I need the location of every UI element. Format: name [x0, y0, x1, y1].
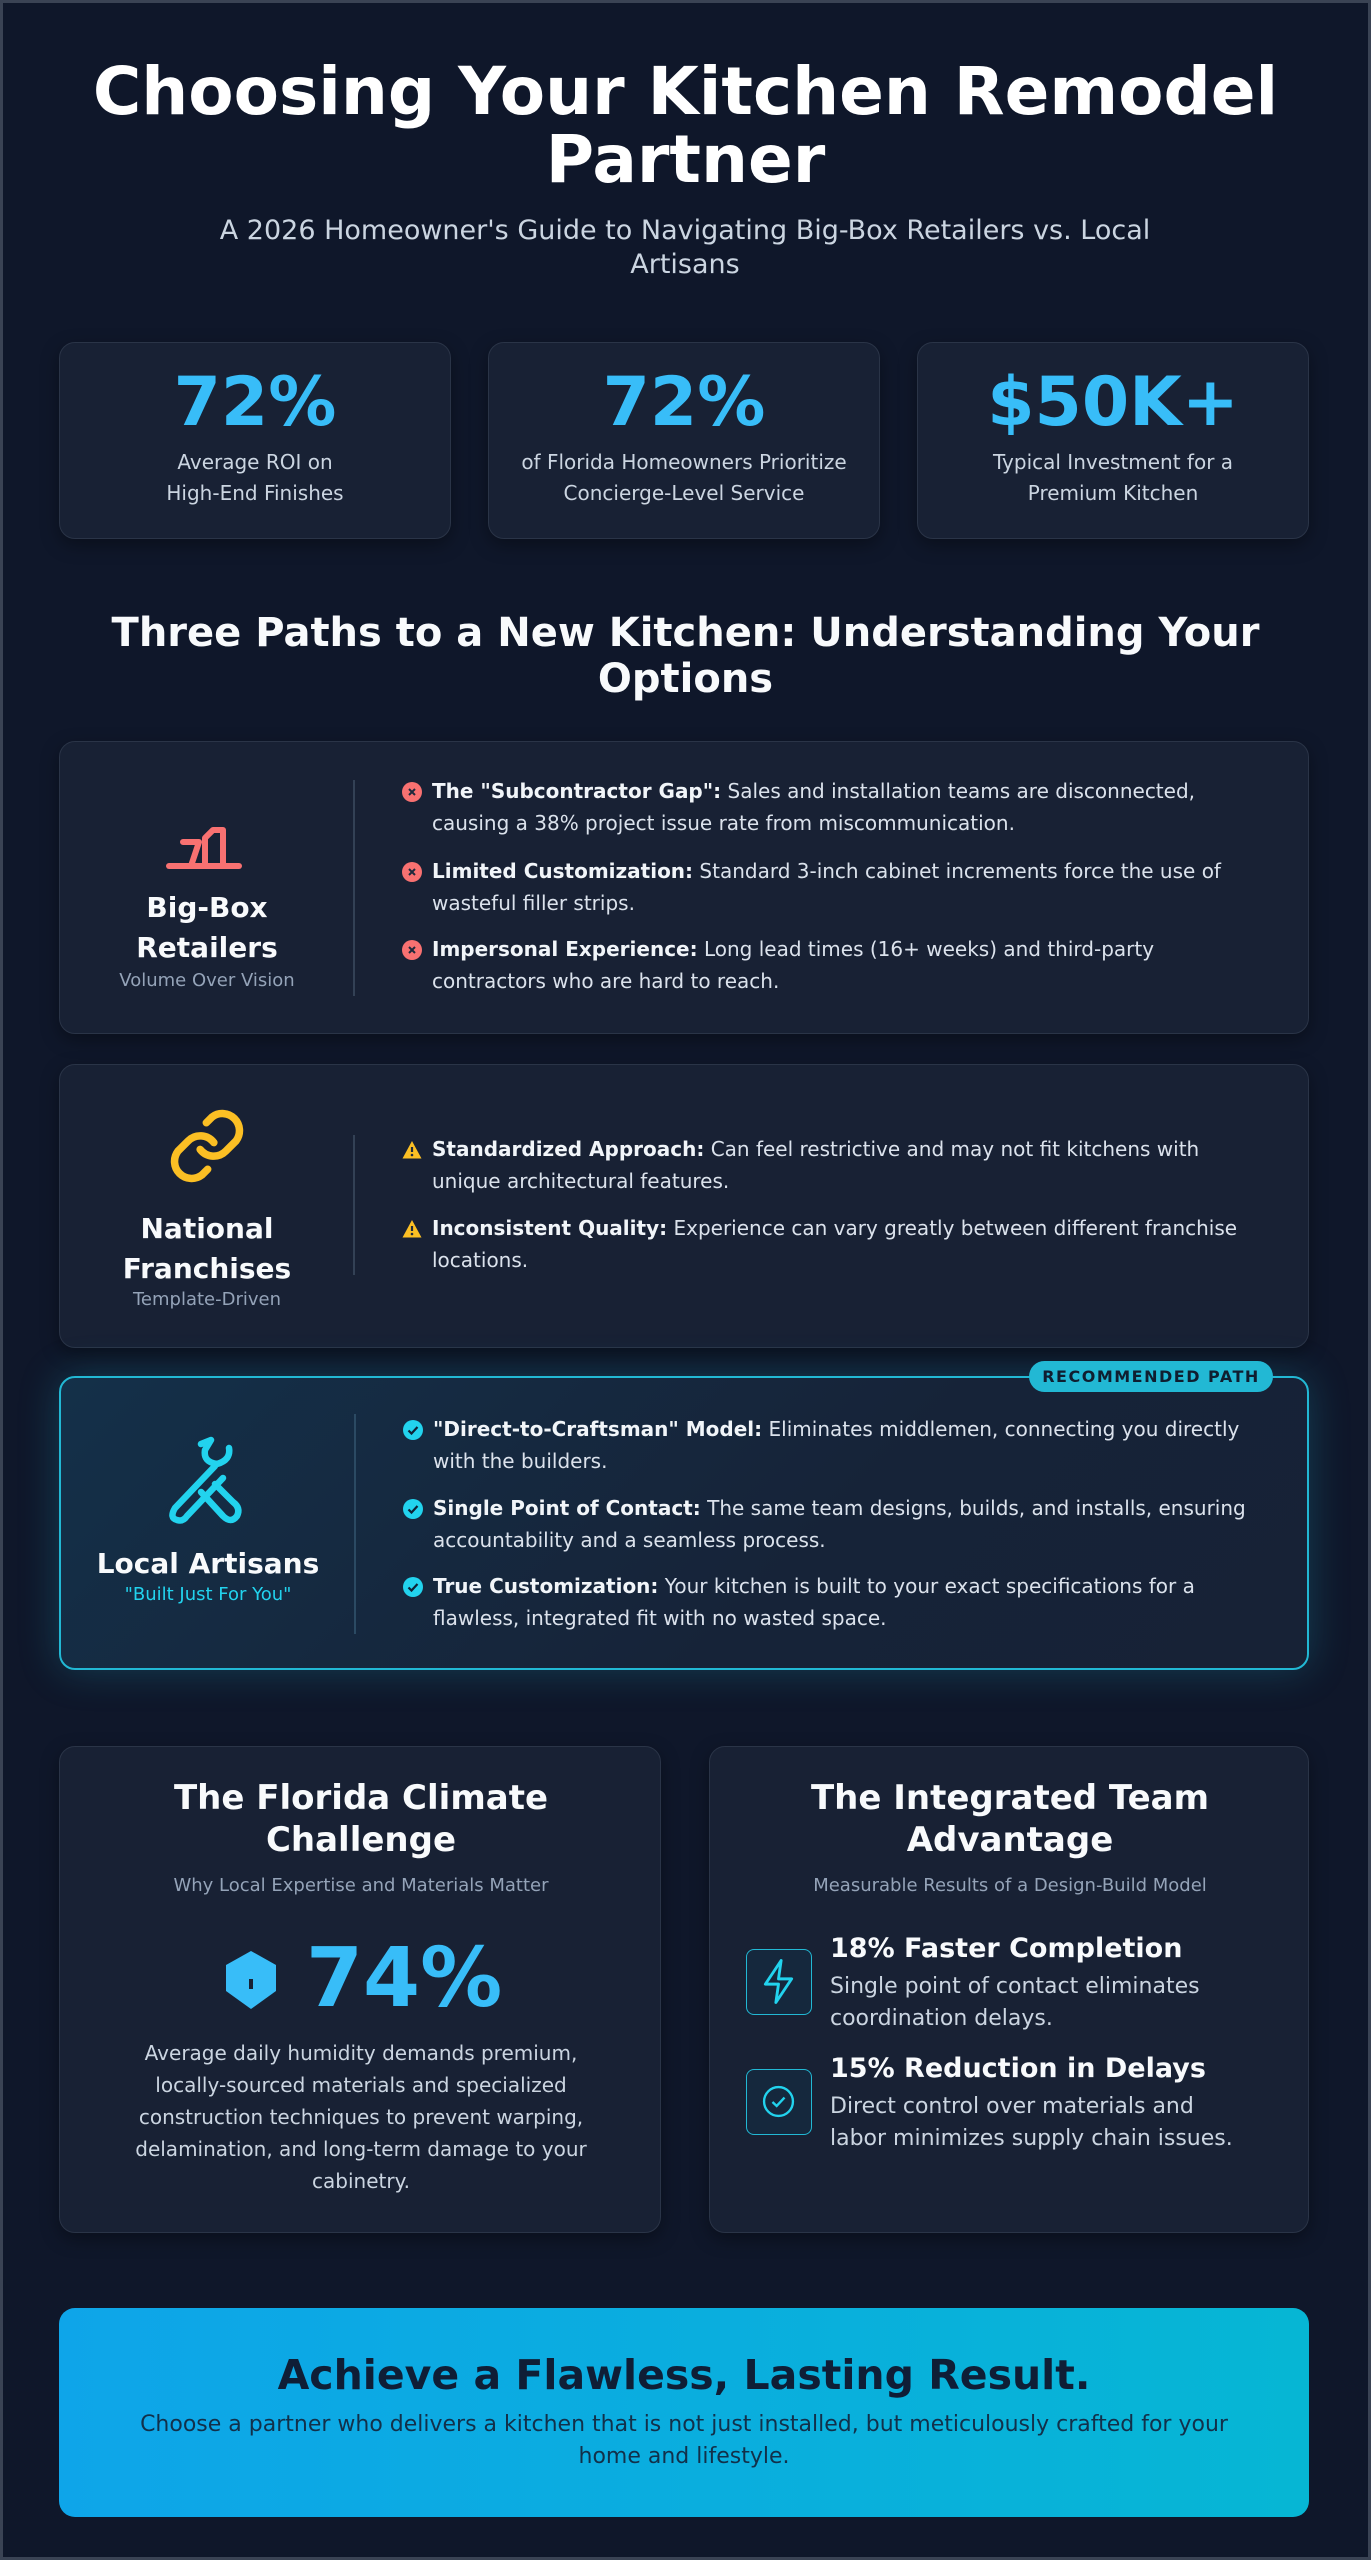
bullets — [403, 1417, 1239, 1473]
section heading: Three Paths to a New Kitchen: Understanding Your — [112, 610, 1259, 656]
label: big-box — [119, 891, 295, 991]
bullets: The "Subcontractor Gap": Sales and installation teams are disconnected, — [432, 779, 1195, 803]
icon: shield — [226, 1951, 276, 2009]
title: Partner — [546, 121, 825, 198]
panel: national franchises: Inconsistent Quality: Experience can vary greatly between different franchise — [432, 1216, 1237, 1240]
CTA heading: Achieve a Flawless, Lasting Result. — [278, 2351, 1090, 2399]
bullets: "Direct-to-Craftsman" Model: Eliminates middlemen, connecting you directly — [433, 1417, 1239, 1441]
icon: link — [170, 1110, 244, 1182]
stat card: ROI — [59, 342, 451, 539]
icon: store — [166, 827, 242, 869]
label: artisans: Local Artisans — [97, 1547, 319, 1580]
item: faster completion: coordination delays. — [830, 2006, 1053, 2031]
item: reduction in delays: Direct control over materials and — [830, 2094, 1194, 2119]
CTA text: Choose a partner who delivers a kitchen that is not just installed, but meticulously crafted for your — [140, 2412, 1228, 2437]
heading: team: Advantage — [907, 1820, 1113, 1860]
stat card: Florida homeowners: 72% — [603, 363, 765, 442]
badge: recommended path: RECOMMENDED PATH — [1042, 1367, 1260, 1386]
bullets — [402, 1137, 1199, 1193]
panel: local artisans (recommended): accountability and a seamless process. — [433, 1528, 826, 1552]
item: faster completion: 18% Faster Completion — [830, 1933, 1182, 1964]
paragraph: Average daily humidity demands premium, locally-sourced materials and specialized construction techniques to prevent warping, delamination, and long-term damage to your cabinetry. — [135, 2041, 587, 2193]
title — [93, 53, 1278, 198]
label: franchises: Franchises — [123, 1252, 291, 1285]
stat card: Florida homeowners — [488, 342, 880, 539]
panel: local artisans (recommended): True Customization: Your kitchen is built to your exact specifications for a — [433, 1574, 1195, 1598]
section heading — [112, 610, 1260, 702]
icon: check circle — [746, 2069, 812, 2135]
stat: humidity 74%: 74% — [306, 1931, 502, 2026]
panel: florida climate — [59, 1746, 661, 2233]
panel: local artisans (recommended): flawless, integrated fit with no wasted space. — [433, 1606, 886, 1630]
label: franchises — [123, 1212, 291, 1310]
CTA text — [140, 2412, 1228, 2469]
label: franchises: National — [140, 1212, 273, 1245]
item: faster completion: Single point of contact eliminates — [830, 1974, 1200, 1999]
panel: local artisans (recommended) — [59, 1376, 1309, 1670]
subtitle: Artisans — [630, 249, 740, 280]
badge: recommended path — [1029, 1361, 1273, 1392]
item: faster completion — [746, 1933, 1200, 2031]
bullets: unique architectural features. — [432, 1169, 729, 1193]
subheading: Measurable Results of a Design-Build Model — [813, 1875, 1207, 1896]
subtitle: A 2026 Homeowner's Guide to Navigating Big-Box Retailers vs. Local — [220, 215, 1150, 246]
heading: team — [811, 1778, 1209, 1860]
stat card: investment: Premium Kitchen — [1028, 481, 1198, 505]
bullets: with the builders. — [433, 1449, 607, 1473]
subheading: Why Local Expertise and Materials Matter — [173, 1875, 549, 1896]
panel: big-box retailers — [59, 741, 1309, 1034]
heading: team: The Integrated Team — [811, 1778, 1209, 1818]
section heading: Options — [598, 656, 773, 702]
label: artisans: "Built Just For You" — [125, 1584, 291, 1605]
CTA banner — [59, 2308, 1309, 2517]
panel: national franchises — [59, 1064, 1309, 1348]
stat card: investment: Typical Investment for a — [993, 450, 1233, 474]
stat card: investment: $50K+ — [987, 363, 1239, 442]
title: Choosing Your Kitchen Remodel — [93, 53, 1278, 130]
panel: big-box retailers: wasteful filler strips. — [432, 891, 635, 915]
heading: climate — [174, 1778, 548, 1860]
panel: national franchises: locations. — [432, 1248, 528, 1272]
item: reduction in delays — [746, 2053, 1233, 2151]
panel: integrated team — [709, 1746, 1309, 2233]
heading: climate: Challenge — [266, 1820, 456, 1860]
stat card: ROI: 72% — [174, 363, 336, 442]
panel: big-box retailers: Impersonal Experience: Long lead times (16+ weeks) and third-party — [432, 937, 1154, 961]
label: big-box: Big-Box — [146, 891, 268, 924]
icon: bolt — [746, 1949, 812, 2015]
label: big-box: Retailers — [136, 931, 278, 964]
stat card: Florida homeowners: Concierge-Level Service — [564, 481, 804, 505]
subtitle — [220, 215, 1150, 280]
stat card: Florida homeowners: of Florida Homeowners Prioritize — [521, 450, 847, 474]
item: reduction in delays: labor minimizes supply chain issues. — [830, 2126, 1233, 2151]
label: big-box: Volume Over Vision — [119, 970, 295, 991]
item: reduction in delays: 15% Reduction in Delays — [830, 2053, 1206, 2084]
label: franchises: Template-Driven — [133, 1289, 281, 1310]
bullets: Standardized Approach: Can feel restrictive and may not fit kitchens with — [432, 1137, 1199, 1161]
bullets — [402, 779, 1195, 835]
panel: local artisans (recommended): Single Point of Contact: The same team designs, builds, and installs, ensuring — [433, 1496, 1246, 1520]
bullets: causing a 38% project issue rate from miscommunication. — [432, 811, 1015, 835]
panel: big-box retailers: Limited Customization: Standard 3-inch cabinet increments force the use of — [432, 859, 1221, 883]
stat card: ROI: High-End Finishes — [166, 481, 344, 505]
stat card: ROI: Average ROI on — [177, 450, 333, 474]
heading: climate: The Florida Climate — [174, 1778, 548, 1818]
icon: tools — [169, 1436, 242, 1524]
panel: big-box retailers: contractors who are hard to reach. — [432, 969, 779, 993]
stat card: investment — [917, 342, 1309, 539]
label: artisans — [97, 1547, 319, 1605]
CTA text: home and lifestyle. — [578, 2444, 790, 2469]
